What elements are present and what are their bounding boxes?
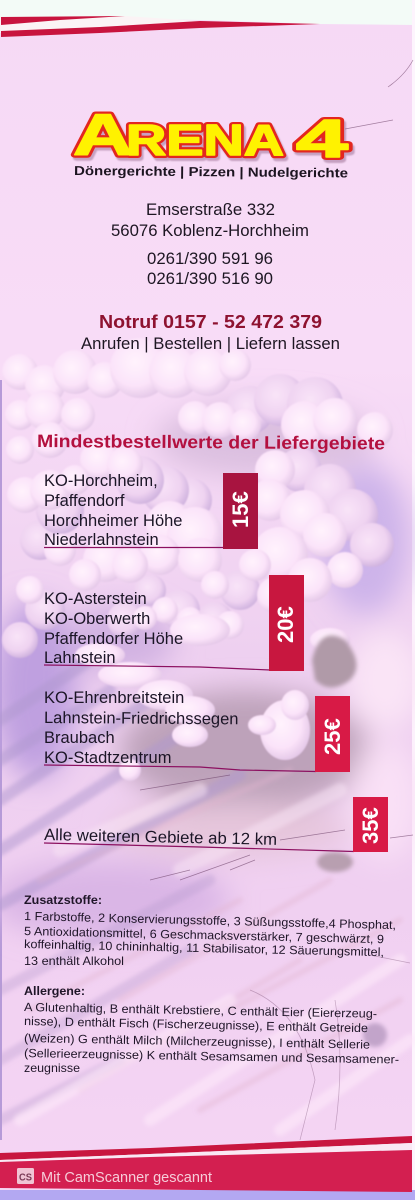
logo yellow fill: A bbox=[73, 103, 133, 168]
additives heading: Zusatzstoffe: bbox=[24, 893, 102, 907]
logo yellow fill: 4 bbox=[296, 109, 348, 169]
allergens note: A Glutenhaltig, B enthält Krebstiere, C enthält Eier (Eiererzeug- bbox=[24, 1000, 377, 1021]
delivery zone 25 euro bbox=[44, 689, 350, 772]
allergens note: zeugnisse bbox=[24, 1061, 80, 1075]
zone list bbox=[44, 472, 182, 549]
logo red outline bbox=[73, 103, 348, 169]
price tag 25 euro bbox=[315, 696, 350, 772]
price tag 25 euro: 25€ bbox=[320, 718, 345, 755]
icon: CamScanner logo: CS bbox=[19, 1172, 32, 1184]
price tag 15 euro: 15€ bbox=[228, 491, 253, 528]
zone list bbox=[44, 689, 239, 767]
icon: CamScanner logo bbox=[17, 1168, 34, 1184]
additives note bbox=[24, 893, 396, 968]
zone list: KO-Horchheim, bbox=[44, 472, 158, 490]
logo: Arena 4 bbox=[73, 103, 350, 172]
logo yellow fill bbox=[73, 103, 348, 169]
heading: delivery minimums: Mindestbestellwerte der Liefergebiete bbox=[37, 431, 385, 453]
logo yellow fill: RENA bbox=[126, 116, 284, 165]
zone list: KO-Asterstein bbox=[44, 590, 147, 608]
zone list: KO-Stadtzentrum bbox=[44, 749, 171, 767]
zone list: Pfaffendorf bbox=[44, 492, 125, 510]
zone text: Alle weiteren Gebiete ab 12 km bbox=[44, 826, 277, 849]
zone list: Lahnstein bbox=[44, 649, 116, 667]
price tag 35 euro: 35€ bbox=[358, 807, 383, 844]
pasta photo background bbox=[0, 338, 415, 1130]
allergens note: (Sellerieerzeugnisse) K enthält Sesamsamen und Sesamsamener- bbox=[24, 1046, 399, 1067]
CamScanner watermark: Mit CamScanner gescannt bbox=[41, 1169, 213, 1186]
allergens note bbox=[24, 984, 399, 1075]
allergens note: nisse), D enthält Fisch (Fischerzeugnisse), E enthält Getreide bbox=[24, 1014, 368, 1035]
delivery zone 35 euro bbox=[44, 797, 388, 852]
logo red outline: RENA bbox=[126, 116, 284, 165]
price tag 20 euro bbox=[269, 575, 304, 671]
allergens heading: Allergene: bbox=[24, 984, 85, 998]
zone list bbox=[44, 590, 183, 667]
logo red outline: 4 bbox=[296, 109, 348, 169]
additives note: koffeinhaltig, 10 chininhaltig, 11 Stabilisator, 12 Säuerungsmittel, bbox=[24, 937, 384, 959]
bottom red band bbox=[0, 1136, 412, 1192]
price tag 15 euro bbox=[223, 473, 258, 549]
zone list: KO-Oberwerth bbox=[44, 610, 150, 628]
zone list: Pfaffendorfer Höhe bbox=[44, 630, 183, 648]
phone numbers: 0261/390 516 90 bbox=[147, 270, 273, 288]
delivery zone 15 euro bbox=[44, 472, 258, 549]
delivery zone 20 euro bbox=[44, 575, 304, 671]
logo shadow bbox=[75, 106, 350, 172]
paper creases bbox=[140, 60, 413, 1140]
price tag 35 euro bbox=[353, 797, 388, 852]
zone list: Lahnstein-Friedrichssegen bbox=[44, 709, 239, 728]
allergens note: (Weizen) G enthält Milch (Milcherzeugnisse), I enthält Sellerie bbox=[24, 1031, 370, 1052]
price tag 20 euro: 20€ bbox=[273, 606, 298, 643]
address bbox=[111, 201, 309, 240]
logo shadow: A bbox=[75, 106, 135, 171]
logo shadow: 4 bbox=[298, 112, 350, 172]
zone list: Braubach bbox=[44, 729, 115, 747]
logo red outline: A bbox=[73, 103, 133, 168]
call to action: Anrufen | Bestellen | Liefern lassen bbox=[81, 335, 340, 353]
address: 56076 Koblenz-Horchheim bbox=[111, 222, 309, 240]
address: Emserstraße 332 bbox=[146, 201, 275, 219]
zone list: Horchheimer Höhe bbox=[44, 512, 182, 530]
zone list: Niederlahnstein bbox=[44, 531, 159, 549]
additives note: 5 Antioxidationsmittel, 6 Geschmacksverstärker, 7 geschwärzt, 9 bbox=[24, 924, 384, 946]
top red stripes bbox=[1, 16, 320, 37]
emergency number: Notruf 0157 - 52 472 379 bbox=[99, 311, 322, 332]
phone numbers: 0261/390 591 96 bbox=[147, 250, 273, 268]
additives note: 13 enthält Alkohol bbox=[24, 954, 124, 968]
phone numbers bbox=[147, 250, 273, 288]
zone list: KO-Ehrenbreitstein bbox=[44, 689, 184, 707]
tagline: Dönergerichte | Pizzen | Nudelgerichte bbox=[74, 163, 348, 180]
additives note: 1 Farbstoffe, 2 Konservierungsstoffe, 3 Süßungsstoffe,4 Phosphat, bbox=[24, 909, 396, 932]
logo shadow: RENA bbox=[128, 119, 286, 168]
